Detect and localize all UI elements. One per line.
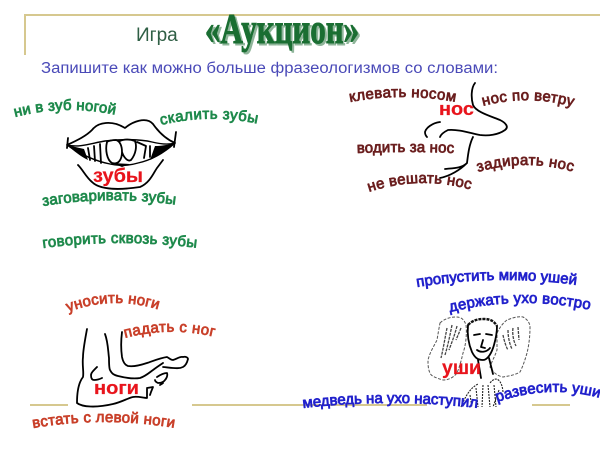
label: уши: уши — [442, 358, 481, 379]
label: ноги: ноги — [94, 378, 139, 398]
phrase: развесить уши: развесить уши — [495, 384, 600, 405]
phrase: задирать нос: задирать нос — [476, 156, 574, 172]
phrase: падать с ног: падать с ног — [124, 323, 216, 338]
label: нос: нос — [439, 99, 474, 119]
phrase: медведь на ухо наступил: медведь на ухо наступил — [302, 394, 478, 410]
phrase: водить за нос: водить за нос — [357, 144, 454, 156]
phrase: ни в зуб ногой: ни в зуб ногой — [14, 98, 116, 118]
phrase: скалить зубы: скалить зубы — [160, 110, 258, 125]
phrase: нос по ветру: нос по ветру — [482, 92, 576, 109]
phrase: заговаривать зубы: заговаривать зубы — [42, 192, 176, 206]
panel: legs — [32, 294, 216, 428]
phrase: не вешать нос: не вешать нос — [367, 174, 472, 192]
panel: ears — [302, 272, 600, 410]
phrase: держать ухо востро: держать ухо востро — [450, 294, 591, 316]
phrase: уносить ноги: уносить ноги — [65, 294, 160, 315]
icon: mouth with teeth — [67, 120, 176, 189]
icon: feet — [77, 329, 188, 407]
phrase: пропустить мимо ушей: пропустить мимо ушей — [416, 272, 577, 290]
phrase: клевать носом: клевать носом — [349, 88, 456, 102]
instruction text: Запишите как можно больше фразеологизмов со словами: — [41, 60, 498, 77]
icon: nose outline — [425, 83, 507, 178]
title: Аукцион: «Аукцион» — [207, 9, 361, 55]
icon: man with big ears — [428, 317, 530, 407]
heading: Игра: Игра — [136, 25, 178, 46]
label: зубы: зубы — [93, 166, 143, 187]
panel: teeth — [14, 98, 258, 249]
title: Аукцион: «Аукцион» — [205, 7, 359, 53]
phrase: встать с левой ноги: встать с левой ноги — [32, 411, 175, 428]
panel: nose — [349, 82, 576, 192]
phrase: говорить сквозь зубы: говорить сквозь зубы — [42, 234, 197, 249]
